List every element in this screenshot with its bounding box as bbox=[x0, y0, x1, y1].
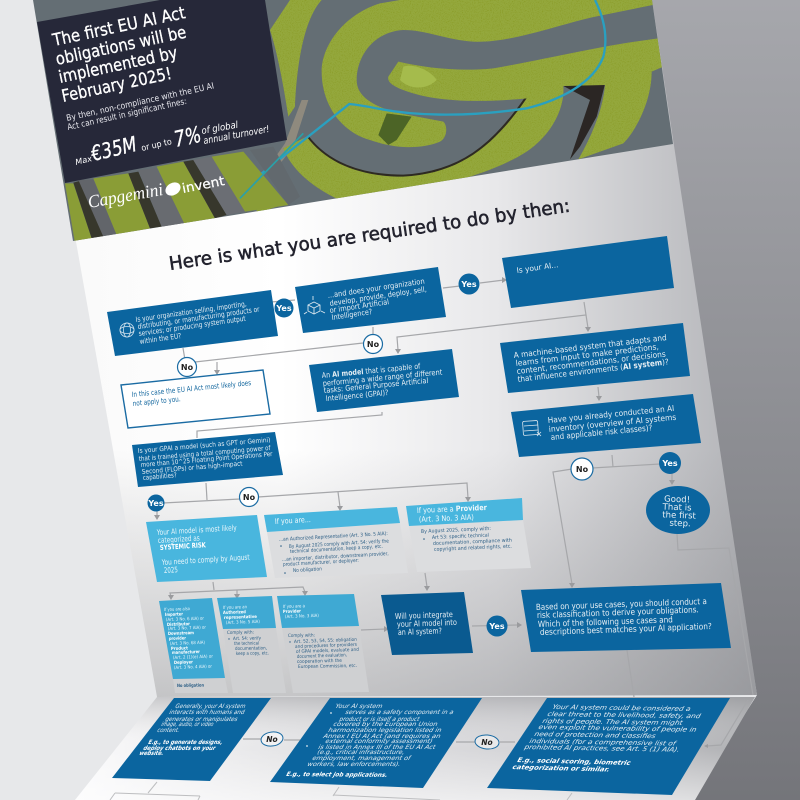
panel: risk classification: risk classification to derive your obligations. bbox=[537, 604, 699, 620]
panel: provider obligations: If you are a bbox=[283, 603, 305, 610]
lower page No badges: No bbox=[266, 735, 278, 744]
panel: develop provide deploy: develop, provide, deploy, sell, bbox=[329, 285, 427, 308]
panel: Is your organization selling bbox=[107, 290, 278, 356]
panel: high risk: Annex I EU AI Act (and requires an bbox=[321, 732, 442, 740]
panel: AI Act does not apply: In this case the EU AI Act most likely does bbox=[131, 378, 252, 399]
panel: GPAI definition: performing a wide range of different bbox=[322, 368, 443, 388]
panel: high risk: external conformity assessment) bbox=[324, 737, 434, 745]
panel: If you are: product manufacturer, or deployer: bbox=[283, 558, 359, 568]
panel: If you are: By August 2025 comply with Art. 54: verify the bbox=[289, 538, 389, 550]
panel: limited risk: generates or manipulates bbox=[164, 715, 239, 723]
panel: authorized representative: representative bbox=[224, 614, 257, 621]
panel: If you are: technical documentation, keep a copy, etc. bbox=[290, 544, 383, 555]
callout: good first step bbox=[646, 486, 710, 534]
logo: Capgemini invent: invent bbox=[181, 174, 226, 197]
panel: high risk: serves as a safety component in a bbox=[344, 708, 455, 716]
panel: If you are a Provider: copyright and related rights, etc. bbox=[434, 544, 512, 553]
panel: if you are also importer: Downstream bbox=[168, 630, 194, 637]
panel: risk classification: Which of the following use cases and bbox=[538, 614, 673, 629]
panel: develop provide deploy: or import Artificial bbox=[329, 297, 390, 315]
panel: If you are a Provider: documentation, compliance with bbox=[433, 538, 512, 547]
panel: If you are a Provider: If you are a Provider bbox=[417, 503, 487, 515]
callout: good first step: step. bbox=[669, 519, 691, 529]
decision badges: No bbox=[367, 340, 380, 349]
panel: AI inventory question: Have you already conducted an AI bbox=[547, 404, 675, 425]
lower page No badges bbox=[260, 731, 500, 750]
headline: implemented by bbox=[57, 43, 179, 88]
decision badges bbox=[147, 274, 681, 636]
panel: AI system definition: that influence environments (AI system)? bbox=[517, 357, 669, 384]
panel: if you are also importer: manufacturer bbox=[172, 649, 201, 656]
panel: integrate model into AI system bbox=[381, 592, 473, 655]
decision badges: No bbox=[243, 493, 256, 502]
panel: if you are also importer: provider bbox=[169, 635, 187, 642]
panel: dark headline box bbox=[37, 0, 287, 183]
decision badges: No bbox=[576, 465, 589, 474]
panel: AI system definition: learns from input to make predictions, bbox=[515, 342, 659, 368]
panel: if you are also importer: If you are also bbox=[164, 606, 190, 613]
heading: Here is what you are required to do by then: bbox=[168, 196, 571, 275]
panel: If you are a Provider: By August 2025, comply with: bbox=[421, 526, 491, 535]
panel: provider obligations: cooperation with the bbox=[297, 658, 342, 665]
panel: systemic risk: categorized as bbox=[158, 533, 200, 545]
panel: if you are also importer: (Art. 3 No. 68 AIA) bbox=[170, 640, 205, 647]
panel: limited risk: deploy chatbots on your bbox=[142, 744, 217, 752]
icon: network globe bbox=[120, 323, 134, 337]
panel: if you are also importer: (Art. 2 (1)(e) AIA) or bbox=[173, 654, 213, 661]
panel: provider obligations bbox=[277, 594, 369, 693]
panel: if you are also importer: (Art. 3 No. 7 AIA) or bbox=[168, 625, 206, 632]
panel: prohibited risk: prohibited AI practices, see Art. 5 (1) AIA). bbox=[522, 743, 681, 754]
panel: high risk: (e.g., critical infrastructure, bbox=[316, 748, 406, 756]
fines: or up to bbox=[140, 137, 173, 154]
panel: Is your organization selling: services; or producing system output bbox=[138, 314, 246, 338]
icon: checklist bbox=[523, 420, 541, 436]
panel: AI Act does not apply bbox=[121, 370, 270, 428]
panel: GPAI model threshold: more than 10^25 Floating Point Operations Per bbox=[140, 450, 273, 469]
panel: GPAI model threshold: Is your GPAI a model (such as GPT or Gemini) bbox=[137, 436, 271, 455]
headline: February 2025! bbox=[60, 64, 174, 107]
panel: risk classification bbox=[521, 583, 731, 652]
panel: Is your AI bbox=[502, 236, 674, 308]
panel: high risk: harmonization legislation listed in bbox=[327, 726, 443, 734]
panel: if you are also importer: Deployer bbox=[174, 659, 194, 666]
panel: if you are also importer: Product bbox=[171, 645, 188, 652]
panel: prohibited risk: individuals (for a comprehensive list of bbox=[528, 737, 679, 748]
panel: provider obligations: Comply with: bbox=[288, 633, 315, 639]
panel: high risk: Your AI system bbox=[334, 702, 384, 710]
decision badges: Yes bbox=[147, 499, 164, 508]
panel: If you are: ...an importer, distributor, downstream provider, bbox=[282, 551, 389, 563]
connector lines and arrows bbox=[154, 277, 753, 697]
panel: GPAI definition: An AI model that is capable of bbox=[321, 362, 421, 380]
panel: prohibited risk: Your AI system could be considered a bbox=[551, 703, 692, 713]
panel: high risk: E.g., to select job applications. bbox=[285, 770, 389, 779]
panel: risk classification: Based on your use cases, you should conduct a bbox=[536, 596, 707, 612]
panel: prohibited risk: even exploit the vulnerability of people in bbox=[537, 723, 698, 734]
panel: high risk: covered by the European Union bbox=[332, 720, 439, 728]
subtext: By then, non-compliance with the EU AI bbox=[65, 81, 215, 124]
panel: provider obligations: of GPAI models, evaluate and bbox=[296, 647, 359, 655]
panel: authorized representative: Comply with: bbox=[227, 630, 254, 636]
panel: GPAI definition bbox=[309, 349, 459, 412]
panel: risk classification: descriptions best matches your AI application? bbox=[540, 621, 712, 637]
subtext: Act can result in significant fines: bbox=[66, 97, 188, 133]
panel: prohibited risk: categorization or similar. bbox=[511, 763, 611, 773]
panel: authorized representative: Authorized bbox=[223, 609, 246, 616]
panel: authorized representative: keep a copy, etc. bbox=[236, 650, 269, 657]
panel: high risk: product or is itself a product bbox=[338, 715, 421, 723]
panel: integrate model into AI system: Will you integrate bbox=[395, 610, 453, 621]
decision badges: Yes bbox=[488, 622, 505, 631]
lower page No badges: No bbox=[481, 738, 493, 747]
fines bbox=[74, 120, 271, 167]
panel: systemic risk: SYSTEMIC RISK bbox=[160, 541, 206, 552]
panel: If you are a Provider: (Art. 3 No. 3 AIA) bbox=[419, 513, 474, 524]
panel: authorized representative: (Art. 3 No. 5 AIA) bbox=[226, 619, 260, 626]
panel: GPAI definition: tasks: General Purpose Artificial bbox=[323, 376, 429, 395]
panel: high risk: workers, law enforcements). bbox=[306, 760, 402, 768]
panel: GPAI model threshold: that is trained using a total computing power of bbox=[138, 444, 271, 463]
panel: provider obligations: Provider bbox=[283, 608, 302, 615]
panel: authorized representative: Art. 54: verify bbox=[233, 636, 261, 642]
panel: systemic risk: Your AI model is most likely bbox=[156, 523, 237, 537]
panel: high risk: is listed in Annex III of the EU AI Act bbox=[317, 743, 437, 751]
photo: aerial hedge maze bbox=[30, 0, 680, 245]
panel: Is your organization selling: Is your organization selling, importing, bbox=[135, 299, 247, 324]
panel: limited risk: interacts with humans and bbox=[168, 708, 246, 716]
panel: authorized representative: the technical bbox=[234, 641, 259, 647]
panel: If you are: If you are... bbox=[275, 515, 311, 526]
panel: prohibited risk: need of protection and classifies bbox=[533, 730, 657, 740]
fines: of global bbox=[201, 120, 239, 137]
panel: Is your AI: Is your AI... bbox=[516, 260, 559, 275]
panel: limited risk: content. bbox=[156, 726, 181, 734]
callout: good first step: Good! bbox=[664, 495, 690, 505]
headline bbox=[50, 3, 188, 107]
panel: provider obligations: European Commission, etc. bbox=[298, 663, 357, 670]
panel: develop provide deploy: Intelligence? bbox=[331, 307, 373, 322]
panel: if you are also importer: Importer bbox=[165, 611, 184, 618]
fines: 7% bbox=[172, 123, 204, 153]
panel: If you are a Provider bbox=[406, 498, 531, 572]
panel: limited risk: Generally, your AI system bbox=[174, 702, 247, 710]
panel: if you are also importer: No obligation bbox=[177, 683, 204, 689]
icon: cube bbox=[304, 296, 325, 314]
logo: Capgemini invent bbox=[86, 174, 226, 212]
panel: GPAI model threshold bbox=[132, 432, 283, 487]
logo: Capgemini invent: Capgemini bbox=[86, 179, 165, 212]
panel: provider obligations: and procedures for providers bbox=[295, 642, 358, 650]
panel: Is your organization selling: distributing, or manufacturing products or bbox=[137, 305, 260, 331]
panel: if you are also importer: (Art. 3 No. 6 AIA) or bbox=[166, 616, 204, 623]
panel: if you are also importer bbox=[159, 598, 228, 693]
panel: systemic risk bbox=[146, 515, 267, 582]
panel: high risk bbox=[270, 698, 482, 788]
fines: annual turnover! bbox=[203, 124, 271, 147]
panel: AI Act does not apply: not apply to you. bbox=[132, 394, 181, 408]
headline: obligations will be bbox=[54, 23, 188, 70]
callout: good first step: the first bbox=[662, 510, 697, 522]
panel: AI system definition: A machine-based system that adapts and bbox=[513, 333, 667, 360]
panel: systemic risk: 2025 bbox=[164, 565, 178, 575]
panel: GPAI model threshold: Second (FLOPs) or has high-impact bbox=[141, 460, 243, 476]
panel: authorized representative: If you are an bbox=[223, 604, 247, 611]
panel: provider obligations: document the evaluation, bbox=[297, 652, 347, 660]
panel: systemic risk: You need to comply by August bbox=[161, 553, 250, 567]
panel: AI inventory question: inventory (overview of AI systems bbox=[548, 413, 677, 434]
fines: €35M bbox=[88, 132, 139, 166]
folded poster upper page bbox=[33, 0, 757, 697]
panel: If you are bbox=[264, 507, 408, 578]
decision badges: Yes bbox=[460, 280, 477, 289]
panel: provider obligations: (Art. 3 No. 3 AIA) bbox=[285, 613, 319, 620]
panel: GPAI model threshold: capabilities? bbox=[142, 471, 177, 482]
panel: prohibited risk: rights of people. The AI system might bbox=[541, 717, 684, 727]
callout: good first step: That is bbox=[661, 502, 692, 514]
panel: develop provide deploy bbox=[295, 267, 446, 333]
panel: develop provide deploy: ...and does your organization bbox=[327, 277, 425, 300]
panel: AI inventory question bbox=[511, 394, 701, 457]
fines: Max bbox=[74, 154, 93, 167]
panel: GPAI definition: Intelligence (GPAI)? bbox=[325, 388, 389, 403]
panel: AI system definition bbox=[500, 323, 690, 393]
panel: limited risk: image, audio, or video bbox=[160, 721, 215, 728]
panel: integrate model into AI system: an AI system? bbox=[398, 626, 442, 637]
panel: high risk: employment, management of bbox=[311, 754, 412, 762]
folded poster lower page bbox=[75, 697, 755, 800]
panel: AI system definition: content, recommendations, or decisions bbox=[516, 350, 666, 376]
panel: authorized representative bbox=[217, 596, 286, 693]
decision badges: Yes bbox=[661, 459, 678, 468]
decision badges: No bbox=[181, 363, 194, 372]
lower page connectors bbox=[110, 700, 748, 800]
headline: The first EU AI Act bbox=[50, 3, 187, 51]
panel: provider obligations: Art. 52, 53, 54, 55: obligation bbox=[294, 637, 357, 645]
panel: If you are a Provider: Art 53: specific technical bbox=[432, 533, 489, 541]
decision badges: Yes bbox=[275, 304, 292, 313]
panel: if you are also importer: Distributor bbox=[167, 621, 191, 628]
panel: limited risk bbox=[112, 698, 271, 781]
panel: if you are also importer: (Art. 3 No. 4 AIA) or bbox=[174, 664, 212, 671]
panel: If you are: ...an Authorized Representative (Art. 3 No. 5 AIA): bbox=[279, 531, 388, 543]
panel: limited risk: website. bbox=[138, 749, 165, 757]
panel: prohibited risk bbox=[487, 698, 730, 795]
panel: Is your organization selling: within the EU? bbox=[139, 331, 182, 346]
panel: AI inventory question: and applicable risk classes)? bbox=[550, 423, 653, 442]
panel: authorized representative: documentation, bbox=[235, 645, 267, 652]
panel: integrate model into AI system: your AI model into bbox=[397, 618, 457, 629]
panel: prohibited risk: clear threat to the livelihood, safety, and bbox=[546, 710, 703, 720]
panel: prohibited risk: E.g., social scoring, biometric bbox=[516, 756, 632, 767]
panel: If you are: No obligation bbox=[293, 566, 322, 574]
panel: limited risk: E.g., to generate designs, bbox=[147, 738, 224, 746]
